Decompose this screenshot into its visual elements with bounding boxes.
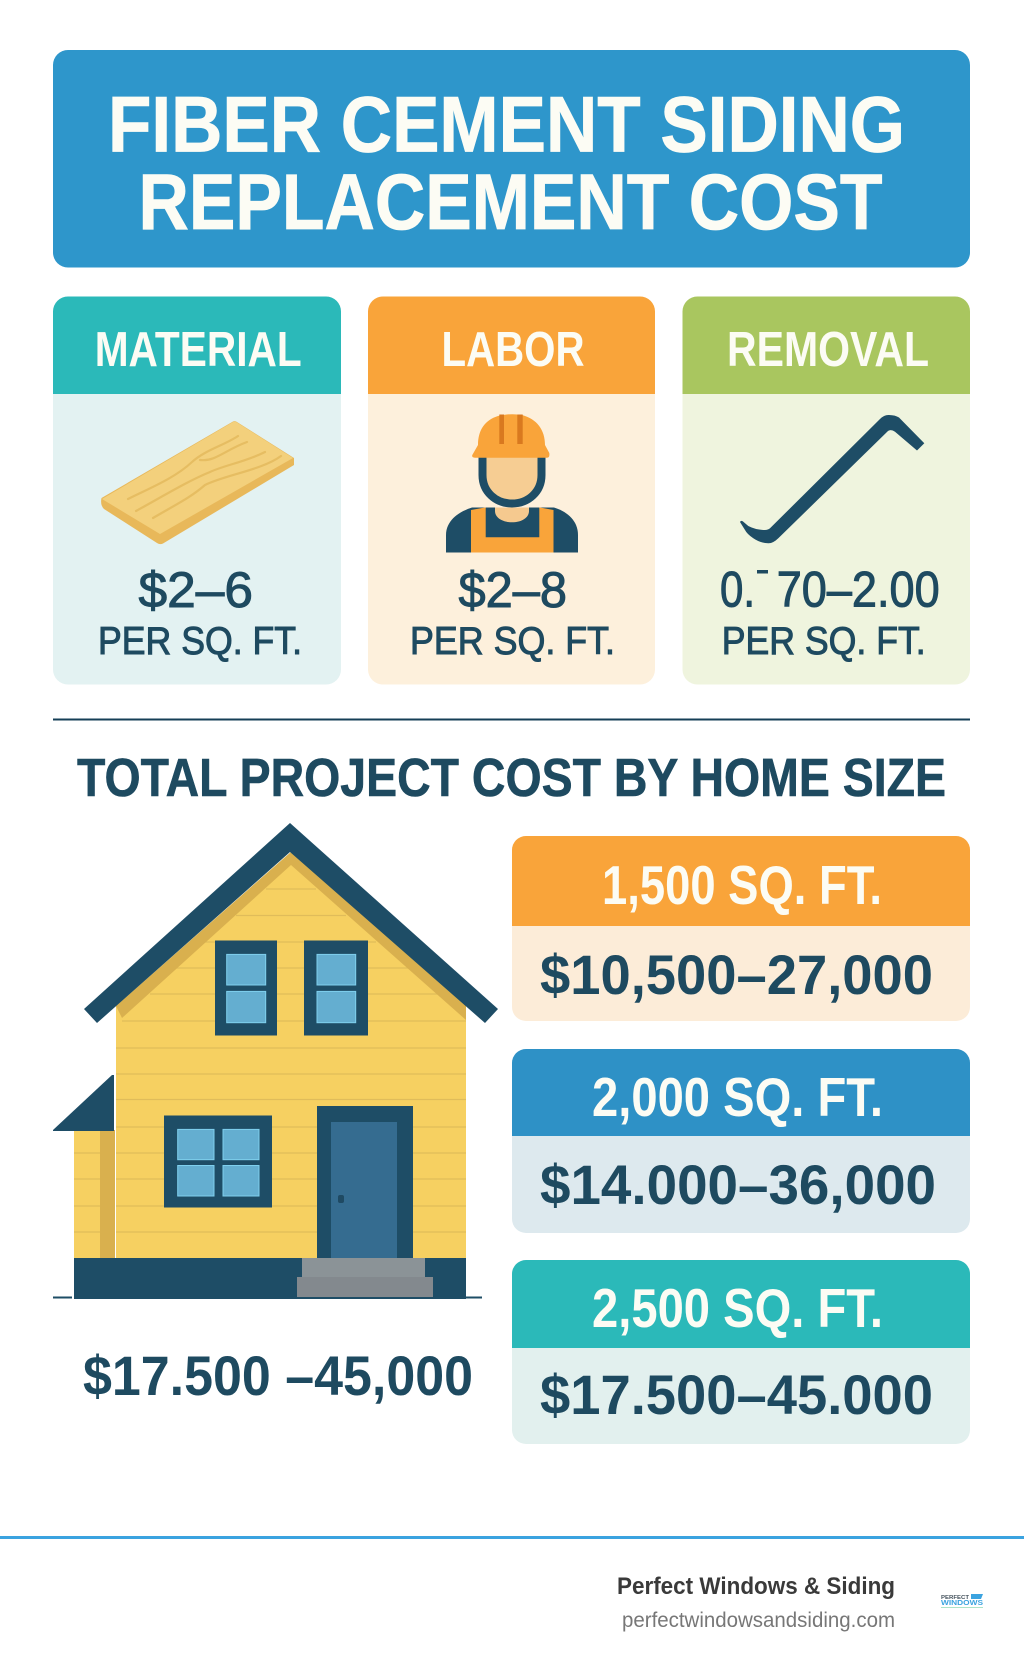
cost card: 1,500 sq ft: $10,500–27,000 [540, 943, 933, 1006]
icon: crowbar [740, 415, 924, 543]
title banner [53, 50, 970, 268]
foundation [74, 1258, 466, 1299]
panel: removal: PER SQ. FT. [722, 620, 926, 663]
panel: labor [368, 296, 655, 684]
icon: worker with hard hat [446, 414, 578, 552]
roof [84, 823, 498, 1023]
panel: labor: PER SQ. FT. [410, 620, 615, 663]
panel: removal [682, 296, 970, 684]
panel: labor: $2–8 [458, 562, 567, 618]
cost card: 2,500 sq ft: 2,500 SQ. FT. [592, 1277, 883, 1339]
annex [53, 1075, 115, 1258]
cost card: 1,500 sq ft [512, 836, 970, 1021]
cost card: 2,000 sq ft: 2,000 SQ. FT. [592, 1066, 883, 1128]
price: removal: 70–2.00 [777, 562, 940, 618]
cost card: 1,500 sq ft: 1,500 SQ. FT. [602, 854, 882, 916]
walls [116, 852, 466, 1258]
ground line [53, 1296, 482, 1298]
cost card: 2,500 sq ft [512, 1260, 970, 1444]
upper windows [215, 940, 368, 1036]
price: removal [720, 562, 940, 618]
icon: fiber cement plank [101, 421, 294, 544]
footer logo [941, 1594, 983, 1608]
panel: material: $2–6 [138, 562, 253, 618]
footer brand name: Perfect Windows & Siding [617, 1573, 895, 1600]
lower window [164, 1116, 272, 1208]
cost card: 2,000 sq ft [512, 1049, 970, 1233]
panel: labor: LABOR [442, 323, 584, 377]
footer logo: PERFECT [941, 1595, 969, 1601]
steps [297, 1258, 433, 1297]
panel: material: PER SQ. FT. [98, 620, 302, 663]
price under house: $17.500 –45,000 [83, 1344, 473, 1407]
price: removal: 0. [720, 562, 755, 618]
cost card: 2,500 sq ft: $17.500–45.000 [540, 1363, 933, 1426]
panel: material: MATERIAL [95, 323, 302, 377]
siding lines [74, 889, 466, 1232]
panel: removal: REMOVAL [727, 323, 929, 377]
title banner: FIBER CEMENT SIDING [108, 80, 905, 168]
footer url: perfectwindowsandsiding.com [622, 1609, 895, 1632]
title banner: REPLACEMENT COST [138, 157, 882, 246]
cost card: 2,000 sq ft: $14.000–36,000 [540, 1153, 936, 1216]
footer logo: WINDOWS [941, 1600, 983, 1607]
door [317, 1106, 413, 1258]
house illustration [53, 823, 498, 1299]
panel: material [53, 296, 341, 684]
roof underside shadow [116, 852, 466, 1020]
